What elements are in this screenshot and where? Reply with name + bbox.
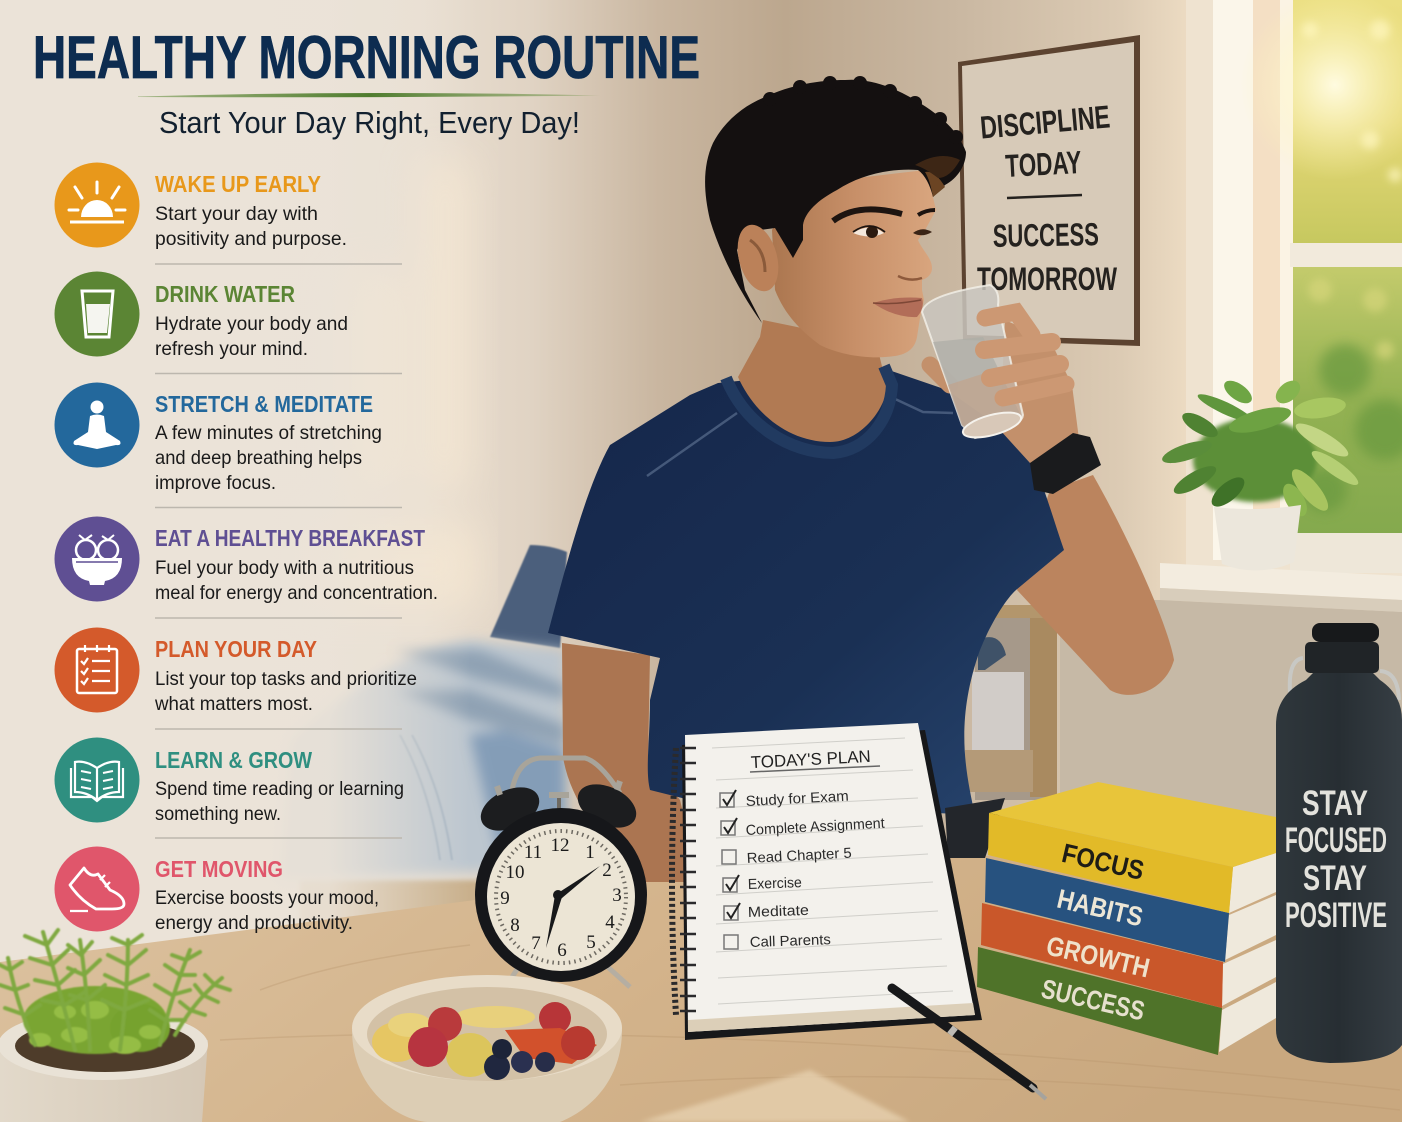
- heading: EAT A HEALTHY BREAKFAST: [155, 525, 425, 551]
- bottle straps: [1290, 658, 1399, 700]
- body text: [155, 887, 379, 934]
- left text-panel fade: [0, 0, 470, 1000]
- clock numerals: 4: [605, 912, 615, 933]
- shirt seams: [647, 398, 953, 476]
- icon: bowl with fruit: [54, 516, 140, 602]
- body text: Spend time reading or learning: [155, 778, 404, 800]
- window: [1160, 0, 1402, 612]
- watch: [1030, 433, 1101, 494]
- icon: running shoe: [54, 846, 140, 932]
- item: meditate: [724, 903, 809, 921]
- windowsill plant: [1160, 376, 1362, 571]
- sunlight patches on wall: [300, 160, 480, 610]
- water bottle: [1276, 623, 1402, 1063]
- item: parents: Call Parents: [750, 932, 831, 951]
- collar: [726, 366, 892, 453]
- plan heading: TODAY'S PLAN: [750, 747, 871, 772]
- body text: something new.: [155, 803, 281, 825]
- neck: [738, 320, 887, 442]
- handle: [512, 758, 620, 793]
- book: growth: [981, 903, 1276, 1008]
- icon: checklist: [54, 628, 140, 712]
- bottle text: STAY: [1302, 784, 1368, 823]
- face: [772, 170, 936, 357]
- book: focus: FOCUS: [1059, 838, 1147, 886]
- blanket: [280, 640, 565, 880]
- subtitle: Start Your Day Right, Every Day!: [159, 105, 580, 140]
- person: [548, 76, 1174, 882]
- icon: open book: [54, 738, 140, 822]
- item: chapter: Read Chapter 5: [746, 846, 852, 867]
- body text: [155, 313, 348, 360]
- poster text: SUCCESS: [993, 216, 1099, 254]
- icon: sunrise: [54, 162, 140, 248]
- body text: and deep breathing helps: [155, 447, 362, 469]
- notebook: [672, 723, 982, 1040]
- heading: GET MOVING: [155, 856, 283, 882]
- body text: Exercise boosts your mood,: [155, 887, 379, 909]
- book: growth: GROWTH: [1043, 931, 1153, 983]
- heading: DRINK WATER: [155, 281, 295, 307]
- body text: Start your day with: [155, 203, 318, 225]
- body text: positivity and purpose.: [155, 228, 347, 250]
- step: wake up early: [54, 162, 347, 250]
- step: stretch and meditate: [54, 382, 382, 494]
- book: habits: [985, 858, 1276, 962]
- bed behind person, right: [965, 605, 1057, 800]
- item: assignment: Complete Assignment: [745, 816, 885, 839]
- clock numerals: 11: [524, 842, 542, 863]
- fruit: [372, 1002, 597, 1080]
- clock numerals: 12: [550, 835, 570, 856]
- poster: discipline today: [958, 35, 1140, 346]
- foreground potted plant: [0, 930, 230, 1122]
- plant pot: [0, 1010, 208, 1122]
- clock hands: [546, 866, 600, 948]
- step: eat a healthy breakfast: [54, 516, 438, 604]
- bottle cap: [1305, 623, 1379, 673]
- clock numerals: 6: [557, 940, 567, 961]
- book: success: SUCCESS: [1038, 974, 1148, 1026]
- clock feet: [507, 960, 630, 987]
- pillow: [490, 545, 567, 648]
- bottle text: [1285, 784, 1387, 935]
- notebook cover: [682, 730, 982, 1040]
- body text: List your top tasks and prioritize: [155, 668, 417, 690]
- arm: left: [562, 643, 700, 882]
- title underline: [138, 93, 600, 97]
- bed with plaid blanket: [280, 545, 567, 930]
- clock numerals: 7: [531, 933, 541, 954]
- body text: what matters most.: [154, 693, 313, 715]
- clock numerals: 5: [586, 932, 596, 953]
- body text: Fuel your body with a nutritious: [155, 557, 414, 579]
- hand palm: [1000, 320, 1080, 463]
- bottle text: STAY: [1303, 859, 1367, 898]
- table: [0, 850, 1402, 1122]
- bed base: [300, 880, 565, 930]
- book: success: [977, 947, 1276, 1055]
- plant foliage: [0, 930, 230, 1054]
- leaves: [1160, 376, 1362, 520]
- spiral binding: [672, 748, 696, 1015]
- heading: WAKE UP EARLY: [155, 171, 321, 197]
- step: get moving: [54, 846, 379, 934]
- fingers: [984, 312, 1066, 398]
- poster text: TODAY: [1005, 144, 1082, 184]
- title: HEALTHY MORNING ROUTINE: [33, 24, 700, 91]
- heading: LEARN & GROW: [155, 747, 312, 773]
- routine list panel: [54, 162, 438, 934]
- clock body: [475, 808, 647, 982]
- fruit bowl: [352, 975, 622, 1122]
- ear: [731, 220, 785, 296]
- hair: [705, 76, 966, 323]
- thumb: [930, 365, 950, 385]
- body text: energy and productivity.: [155, 912, 353, 934]
- alarm clock: [474, 758, 647, 987]
- lower right wall: [1060, 600, 1402, 880]
- clock numerals: 3: [612, 885, 622, 906]
- book: focus: [988, 782, 1276, 913]
- icon: meditation figure: [54, 382, 140, 468]
- step: drink water: [54, 272, 348, 360]
- arm: right: [1017, 475, 1174, 695]
- item: exercise: [723, 875, 802, 893]
- ruled lines: [712, 738, 953, 1004]
- stacked books: [977, 782, 1276, 1055]
- item: meditate: Meditate: [748, 903, 809, 921]
- notebook page: [685, 723, 975, 1032]
- clock numerals: 8: [510, 915, 520, 936]
- item: study: Study for Exam: [745, 789, 849, 810]
- bottle body: [1276, 670, 1402, 1063]
- body text: improve focus.: [155, 472, 276, 494]
- heading: STRETCH & MEDITATE: [155, 391, 373, 417]
- clock numerals: [500, 835, 622, 961]
- body text: [155, 422, 382, 494]
- body text: meal for energy and concentration.: [155, 582, 438, 604]
- dark shorts: [945, 798, 1005, 858]
- step: plan your day: [54, 628, 417, 715]
- pen: [892, 988, 1046, 1099]
- book: habits: HABITS: [1054, 884, 1146, 932]
- clock face: [487, 823, 635, 971]
- body text: refresh your mind.: [155, 338, 308, 360]
- pot: [1214, 505, 1301, 571]
- facial features: [833, 209, 935, 317]
- plan checklist: [720, 789, 885, 951]
- icon: glass: [54, 272, 140, 356]
- item: exercise: Exercise: [748, 875, 802, 893]
- step: learn and grow: [54, 738, 404, 825]
- clock numerals: 2: [602, 860, 612, 881]
- body text: A few minutes of stretching: [155, 422, 382, 444]
- poster text: TOMORROW: [977, 261, 1118, 297]
- glass of water: [922, 285, 1024, 442]
- body text: [155, 203, 347, 250]
- t-shirt: [548, 367, 1064, 815]
- window view: [1240, 0, 1402, 536]
- clock numerals: 1: [585, 842, 595, 863]
- clock numerals: 10: [506, 862, 524, 883]
- poster text: DISCIPLINE: [979, 98, 1111, 146]
- poster text: [977, 98, 1118, 297]
- body text: [155, 557, 438, 604]
- body text: [154, 668, 417, 715]
- heading: PLAN YOUR DAY: [155, 636, 317, 662]
- body text: Hydrate your body and: [155, 313, 348, 335]
- bells: [474, 776, 643, 839]
- body text: [155, 778, 404, 825]
- clock numerals: 9: [500, 888, 510, 909]
